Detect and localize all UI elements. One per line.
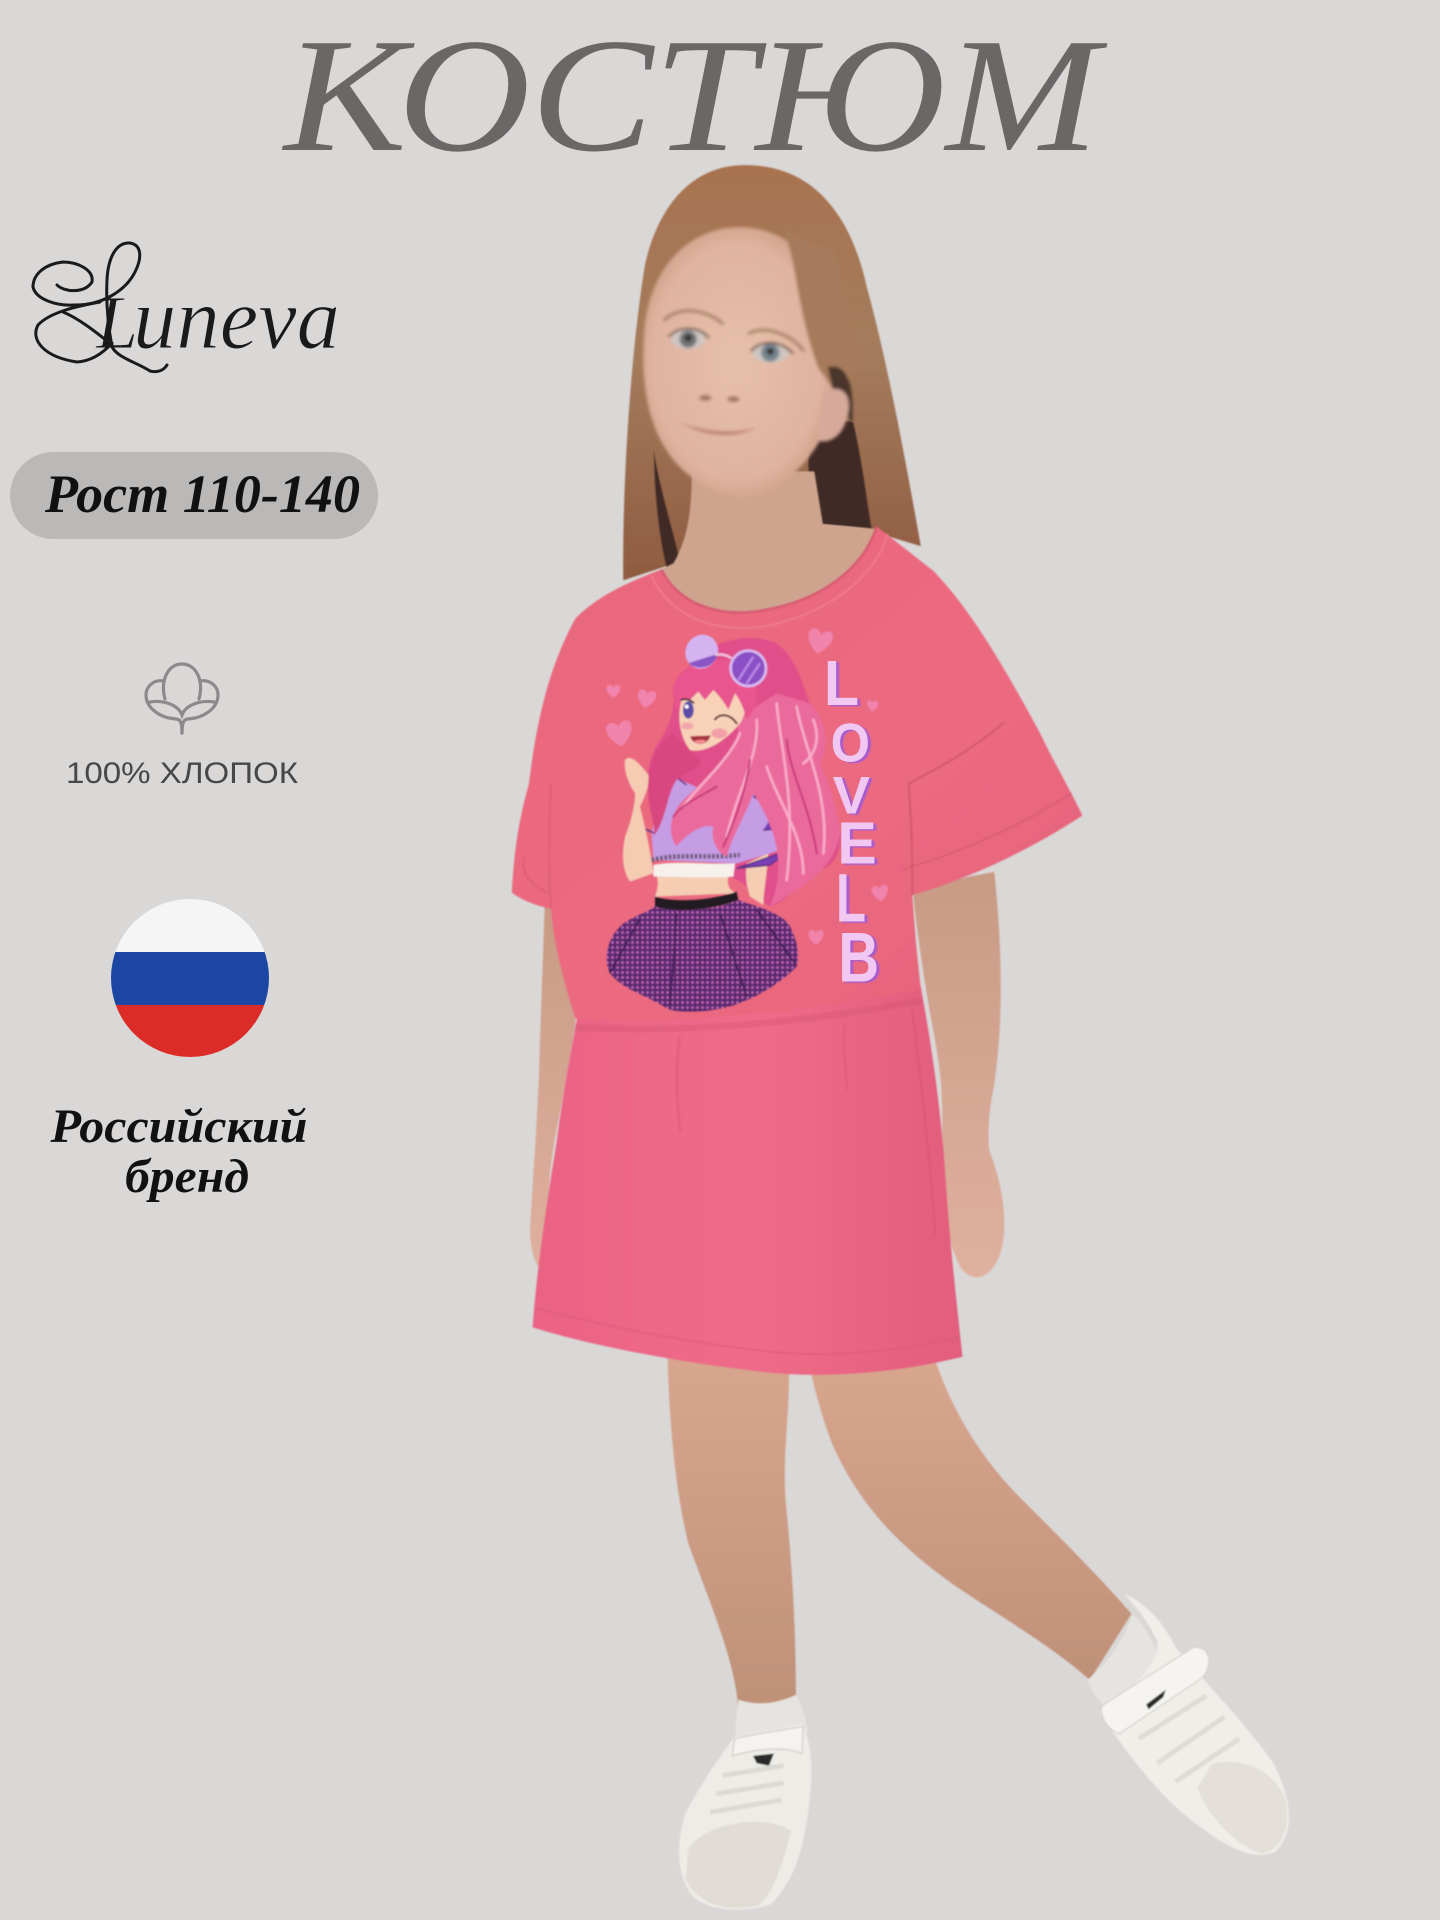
brand logo: uneva — [133, 271, 340, 368]
print skirt — [607, 900, 798, 1012]
shirt print: anime girl — [605, 627, 890, 1012]
right arm and hand — [912, 872, 1004, 1277]
print vertical lettering: B — [838, 918, 879, 997]
print vertical lettering: L — [824, 647, 859, 719]
brand origin text: бренд — [125, 1150, 249, 1203]
print vertical lettering: E — [837, 809, 877, 876]
girl in pink outfit — [512, 165, 1289, 1910]
print vertical lettering: O — [831, 712, 870, 774]
print hearts — [605, 627, 890, 945]
brand logo — [33, 243, 340, 372]
print far arm — [746, 853, 768, 905]
title: КОСТЮМ — [282, 6, 1108, 186]
brand origin text: Российский — [49, 1100, 308, 1153]
brand origin text — [49, 1100, 308, 1203]
print left lock — [648, 733, 701, 837]
t-shirt — [512, 527, 1082, 1020]
material label: 100% ХЛОПОК — [66, 757, 299, 790]
icon: cotton boll — [146, 664, 218, 733]
print top — [652, 777, 790, 863]
print near arm and hand — [623, 758, 653, 882]
print waistband — [655, 892, 738, 910]
print vertical lettering — [824, 647, 879, 997]
shorts — [533, 987, 962, 1375]
right shoe — [1100, 1594, 1289, 1855]
face — [643, 227, 864, 496]
print face — [679, 683, 746, 751]
left arm — [530, 900, 578, 1271]
socks — [736, 1614, 1160, 1741]
left shoe — [679, 1724, 811, 1910]
print front hair — [671, 693, 840, 907]
icon: russian flag — [111, 899, 269, 1057]
height badge — [10, 452, 378, 539]
height badge: Рост 110-140 — [44, 464, 360, 524]
print vertical lettering: V — [833, 766, 870, 825]
print bangs — [673, 659, 757, 720]
print midriff — [655, 877, 737, 897]
neck and chest — [661, 471, 877, 612]
print eyes and mouth — [683, 701, 694, 719]
right leg — [808, 1353, 1131, 1680]
print sunglasses — [679, 629, 724, 675]
left leg — [667, 1347, 796, 1708]
print hair back — [648, 638, 840, 907]
brand logo: L — [95, 281, 138, 365]
print vertical lettering: L — [836, 861, 866, 937]
hair back — [623, 165, 921, 580]
print crop band — [653, 863, 735, 877]
